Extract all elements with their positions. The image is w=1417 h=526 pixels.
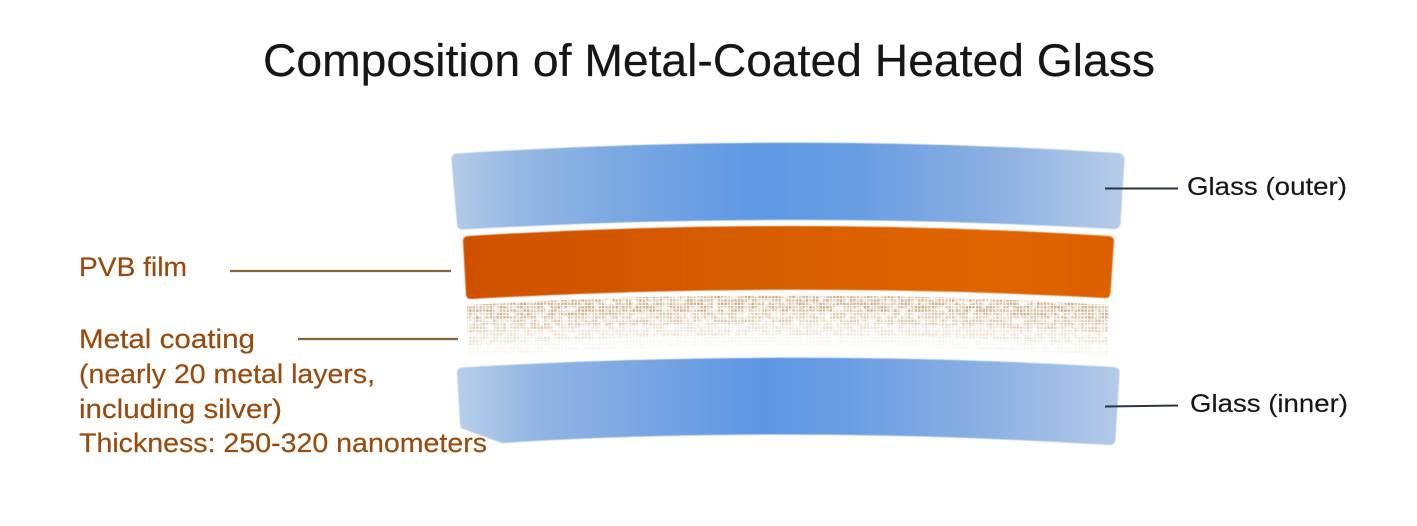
title: Composition of Metal-Coated Heated Glass xyxy=(263,35,1155,86)
label: metal coating: Thickness: 250-320 nanometers xyxy=(79,428,487,458)
layer: PVB film xyxy=(463,226,1114,299)
label: glass outer: Glass (outer) xyxy=(1187,173,1347,201)
layer: outer glass xyxy=(451,143,1124,230)
layer: metal coating xyxy=(467,295,1109,356)
label: metal coating: including silver) xyxy=(79,394,282,424)
label: glass inner: Glass (inner) xyxy=(1190,390,1348,418)
label: metal coating: Metal coating xyxy=(79,324,255,354)
label: metal coating: (nearly 20 metal layers, xyxy=(79,359,375,389)
layer: inner glass xyxy=(457,358,1120,445)
infographic: glass composition diagram xyxy=(80,42,1346,452)
label: metal coating xyxy=(79,324,487,458)
label: PVB film: PVB film xyxy=(79,252,187,282)
